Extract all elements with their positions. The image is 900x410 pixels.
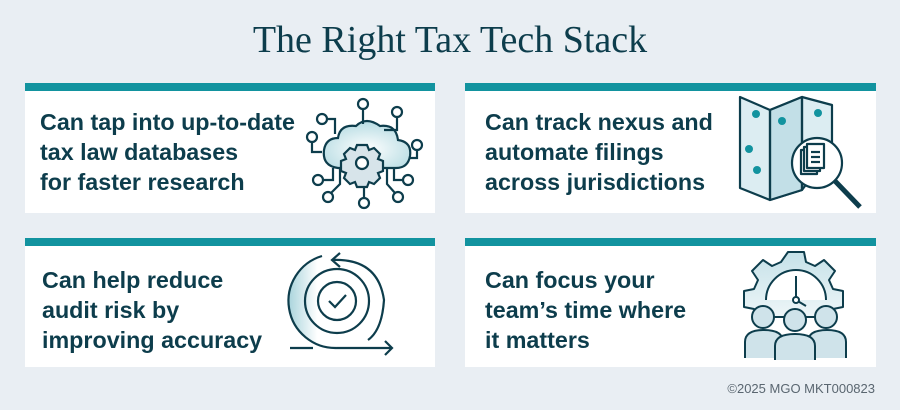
panel: databases bbox=[25, 83, 435, 213]
text: nexus: automate filings bbox=[485, 139, 664, 165]
panel: nexus bbox=[465, 83, 876, 213]
text: team time bbox=[485, 267, 686, 353]
text: databases: tax law databases bbox=[40, 139, 238, 165]
text: databases: for faster research bbox=[40, 169, 245, 195]
text: audit: audit risk by bbox=[42, 297, 179, 323]
panel: team time bbox=[465, 238, 876, 367]
title: The Right Tax Tech Stack bbox=[253, 19, 647, 61]
text: nexus bbox=[485, 109, 713, 195]
text: nexus: Can track nexus and bbox=[485, 109, 713, 135]
icon: cloud gear bbox=[306, 98, 424, 210]
panel: audit bbox=[25, 238, 435, 367]
text: team time: team’s time where bbox=[485, 297, 686, 323]
icon: gear clock team bbox=[743, 251, 847, 360]
icon: map magnifier bbox=[738, 96, 862, 209]
text: audit bbox=[42, 267, 262, 353]
copyright: ©2025 MGO MKT000823 bbox=[727, 381, 875, 396]
text: databases: Can tap into up-to-date bbox=[40, 109, 295, 135]
text: nexus: across jurisdictions bbox=[485, 169, 705, 195]
text: team time: it matters bbox=[485, 327, 590, 353]
icon: cycle check bbox=[287, 252, 394, 356]
text: audit: Can help reduce bbox=[42, 267, 223, 293]
text: audit: improving accuracy bbox=[42, 327, 262, 353]
text: team time: Can focus your bbox=[485, 267, 655, 293]
text: databases bbox=[40, 109, 295, 195]
